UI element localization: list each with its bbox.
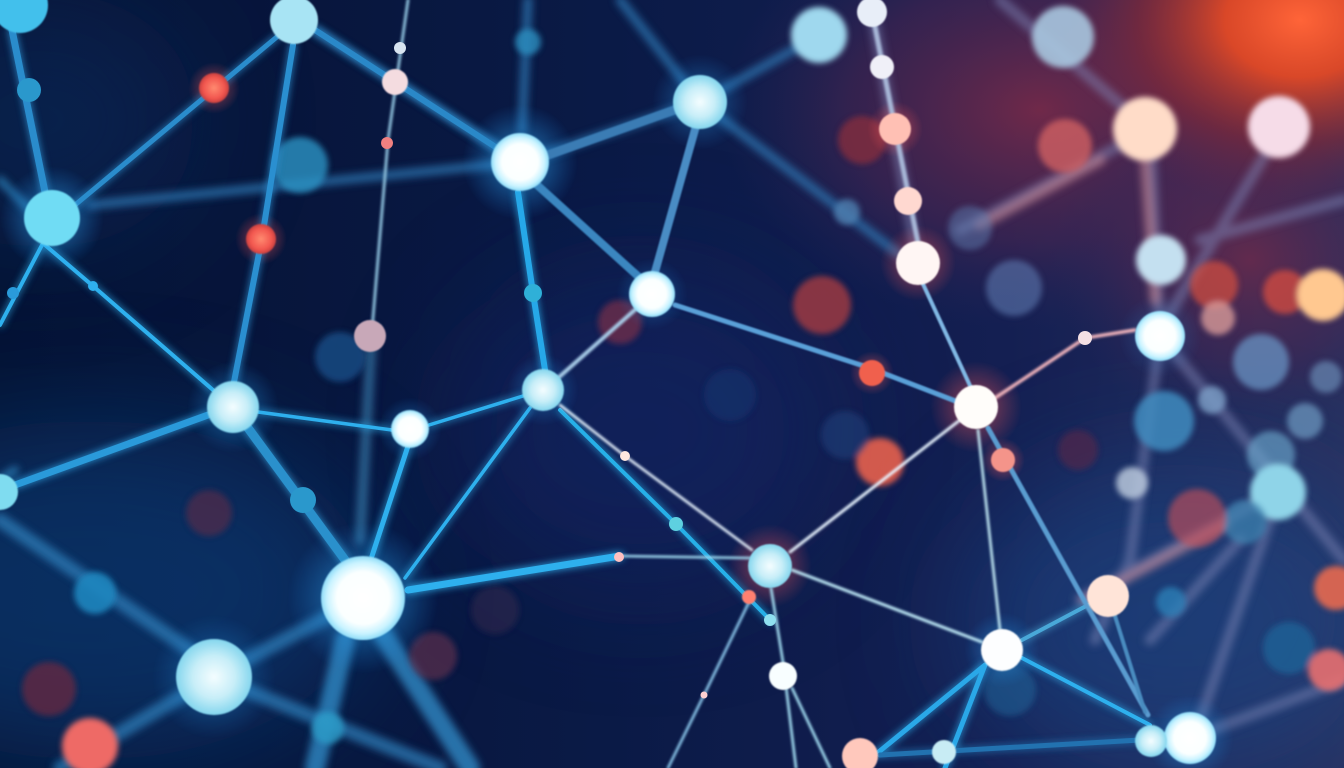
focused network links: white <box>372 0 1135 768</box>
small connector beads <box>7 42 1092 698</box>
red accent nodes <box>199 73 1129 768</box>
focused network links: steel blue <box>536 108 1148 715</box>
